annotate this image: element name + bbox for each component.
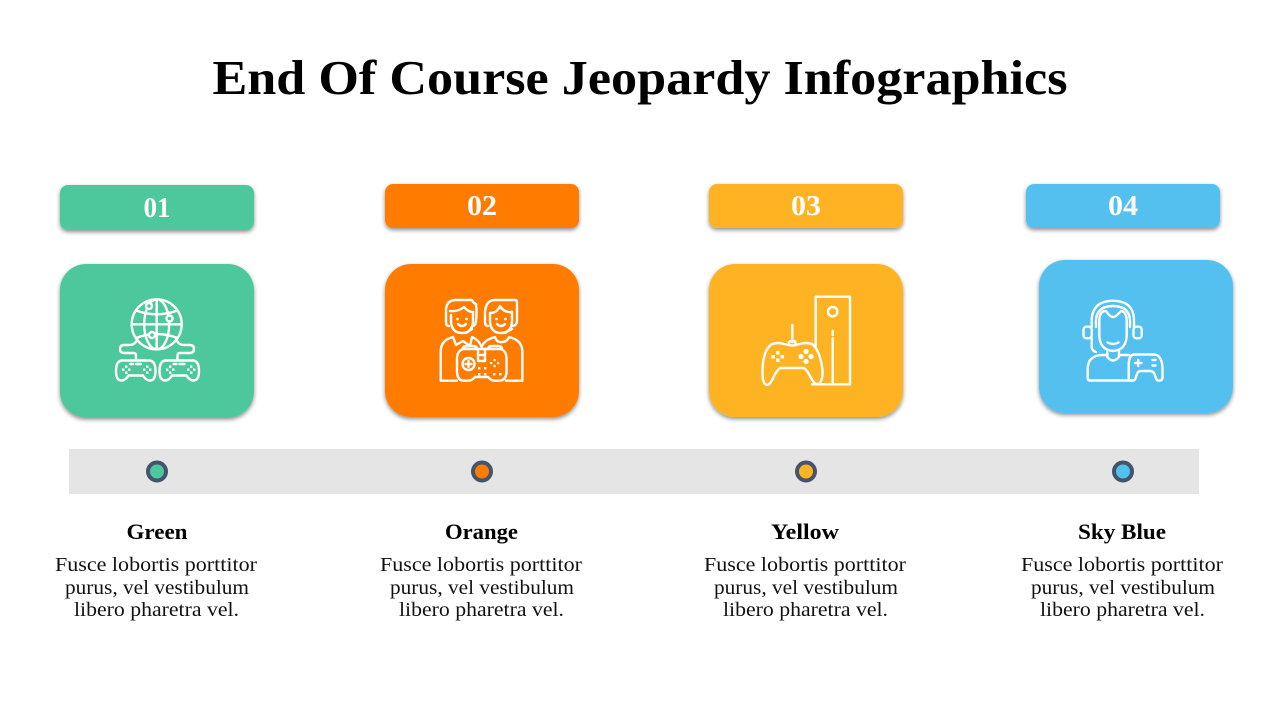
timeline dot yellow	[797, 462, 815, 480]
panel: green	[55, 185, 257, 621]
panel: yellow	[704, 184, 906, 621]
description yellow	[704, 554, 906, 621]
description sky blue: Fusce lobortis porttitor	[1021, 554, 1223, 576]
number badge 03: 03	[791, 191, 821, 222]
description yellow: Fusce lobortis porttitor	[704, 554, 906, 576]
timeline bar	[69, 449, 1199, 494]
timeline dot green	[148, 462, 166, 480]
panel: sky blue	[1021, 184, 1233, 621]
description green: purus, vel vestibulum	[65, 577, 249, 599]
description green	[55, 554, 257, 621]
heading yellow: Yellow	[771, 519, 839, 544]
heading sky blue: Sky Blue	[1078, 519, 1166, 544]
description sky blue: libero pharetra vel.	[1040, 599, 1205, 621]
timeline dot orange	[473, 462, 491, 480]
icon card: gamer with headset and controller	[1039, 260, 1233, 413]
timeline dot sky blue	[1114, 462, 1132, 480]
number badge 01	[60, 185, 254, 230]
description sky blue	[1021, 554, 1223, 621]
number badge 02: 02	[467, 191, 497, 222]
number badge 02	[385, 184, 579, 228]
heading orange: Orange	[445, 519, 518, 544]
description green: libero pharetra vel.	[74, 599, 239, 621]
icon card: globe with two game controllers	[60, 264, 254, 418]
number badge 01: 01	[144, 193, 170, 224]
icon card: game console and controller	[709, 264, 903, 417]
description green: Fusce lobortis porttitor	[55, 554, 257, 576]
icon card: two gamers with controller	[385, 264, 579, 417]
description orange: purus, vel vestibulum	[390, 577, 574, 599]
title: End Of Course Jeopardy Infographics	[212, 50, 1068, 105]
panel: orange	[380, 184, 582, 621]
description sky blue: purus, vel vestibulum	[1031, 577, 1215, 599]
number badge 04	[1026, 184, 1220, 228]
description orange: libero pharetra vel.	[399, 599, 564, 621]
heading green: Green	[126, 519, 188, 544]
number badge 04: 04	[1108, 191, 1138, 222]
description orange: Fusce lobortis porttitor	[380, 554, 582, 576]
description orange	[380, 554, 582, 621]
description yellow: purus, vel vestibulum	[714, 577, 898, 599]
number badge 03	[709, 184, 903, 228]
description yellow: libero pharetra vel.	[723, 599, 888, 621]
